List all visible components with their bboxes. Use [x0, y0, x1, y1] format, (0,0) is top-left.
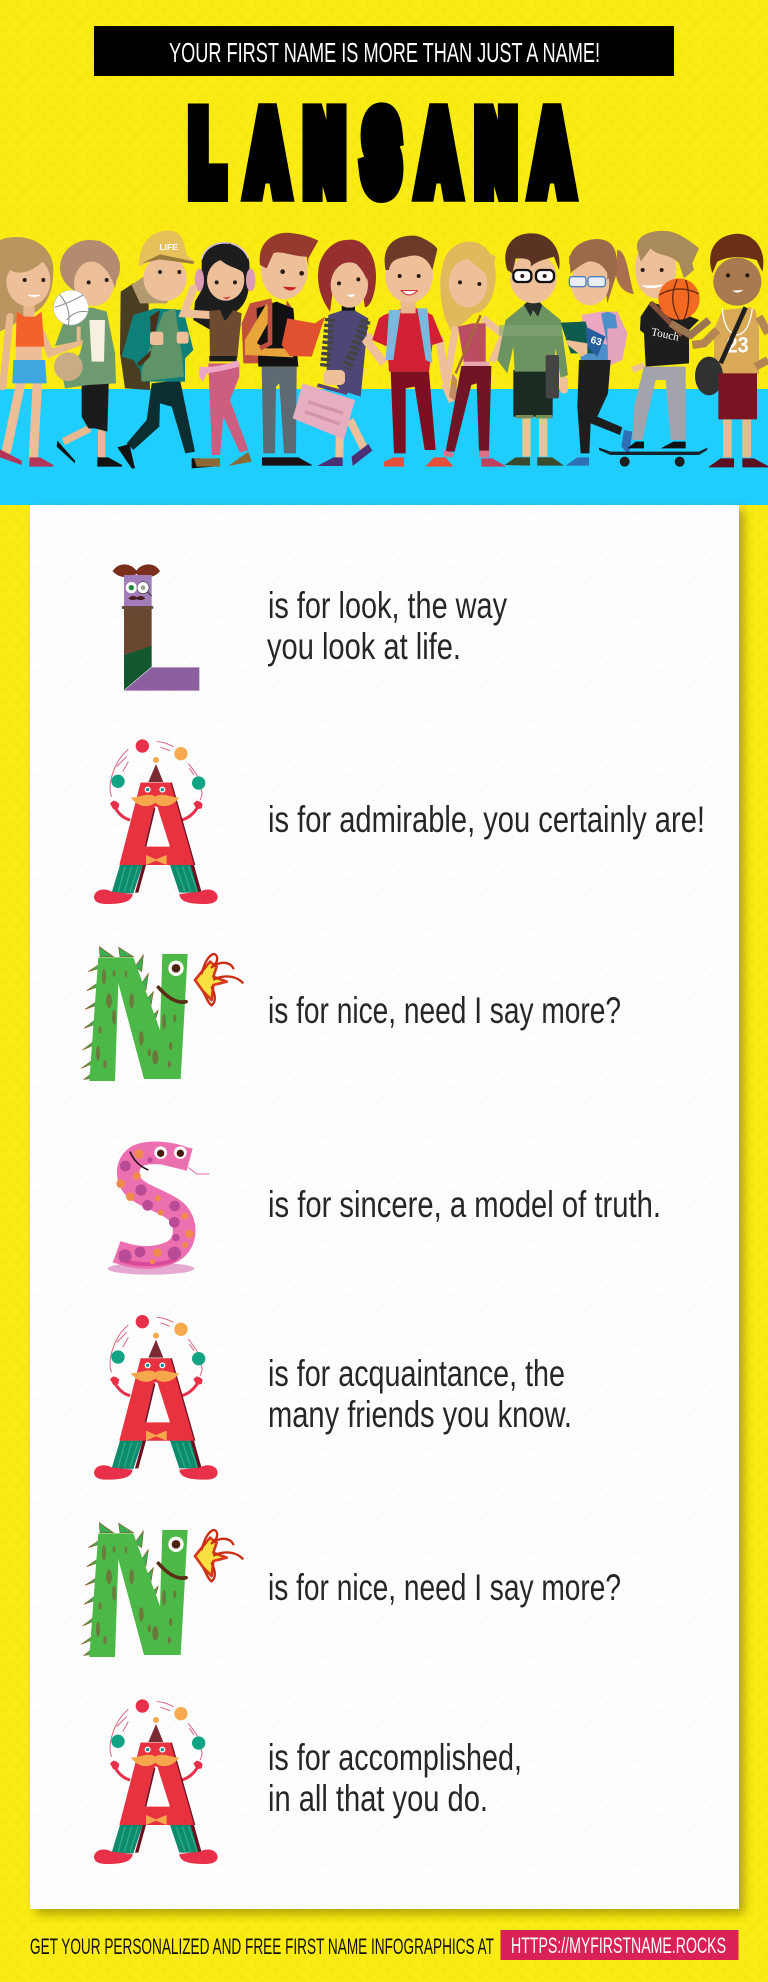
letter icon: L	[113, 564, 199, 691]
text: A accomplished: is for accomplished,	[268, 1737, 522, 1778]
letter icon: S	[108, 1143, 209, 1275]
student 11: skateboarder with basketball	[599, 231, 709, 467]
student 6: girl with pink bag	[293, 240, 376, 466]
text: A accomplished	[268, 1737, 522, 1819]
illustration: group of students	[0, 231, 768, 468]
student 12: boy in number 23 tank top: 23	[727, 333, 749, 358]
blue floor band	[0, 389, 768, 505]
student 10: girl with ponytail and book	[561, 239, 634, 466]
text: A acquaintance: many friends you know.	[268, 1394, 572, 1435]
footer call to action: GET YOUR PERSONALIZED AND FREE FIRST NAME INFOGRAPHICS AT	[30, 1934, 494, 1959]
text: L	[267, 585, 507, 667]
letter icon: N second	[81, 1523, 243, 1657]
text: A accomplished: in all that you do.	[268, 1778, 488, 1819]
panel shadow	[36, 510, 744, 1914]
student 5: boy with red hair and book	[242, 233, 325, 466]
text: A acquaintance: is for acquaintance, the	[268, 1353, 565, 1394]
student 11: skateboarder with basketball: Touch	[650, 326, 680, 344]
student 10: girl with ponytail and book: 63	[589, 335, 603, 349]
student 4: girl with headphones	[184, 242, 255, 467]
student 9: boy with glasses	[497, 233, 568, 466]
student 3: boy with backpack and cap: LIFE	[159, 242, 178, 252]
panel: name meanings	[30, 505, 739, 1909]
student 12: boy in number 23 tank top	[692, 234, 768, 467]
student 7: boy in red shirt	[367, 236, 453, 467]
left half of students	[0, 231, 376, 468]
letter icon: N	[81, 947, 243, 1081]
student 8: blonde girl	[440, 242, 506, 467]
title: name: LANSANA	[191, 96, 571, 211]
letter icon: A	[94, 739, 218, 904]
student 1: girl in orange top	[0, 237, 80, 467]
right half of students	[367, 231, 768, 467]
text: L: you look at life.	[267, 626, 461, 667]
header banner	[94, 26, 674, 76]
student 3: boy with backpack and cap	[117, 231, 213, 468]
letter icon: A third	[94, 1699, 218, 1864]
student 2: girl with volleyball	[54, 240, 122, 467]
text: S sincere: is for sincere, a model of truth.	[268, 1184, 661, 1225]
letter icon: A second	[94, 1315, 218, 1480]
text: N nice second: is for nice, need I say more?	[268, 1567, 621, 1608]
text: L: is for look, the way	[268, 585, 507, 626]
text: A acquaintance	[268, 1353, 572, 1435]
text: N nice: is for nice, need I say more?	[268, 990, 621, 1031]
